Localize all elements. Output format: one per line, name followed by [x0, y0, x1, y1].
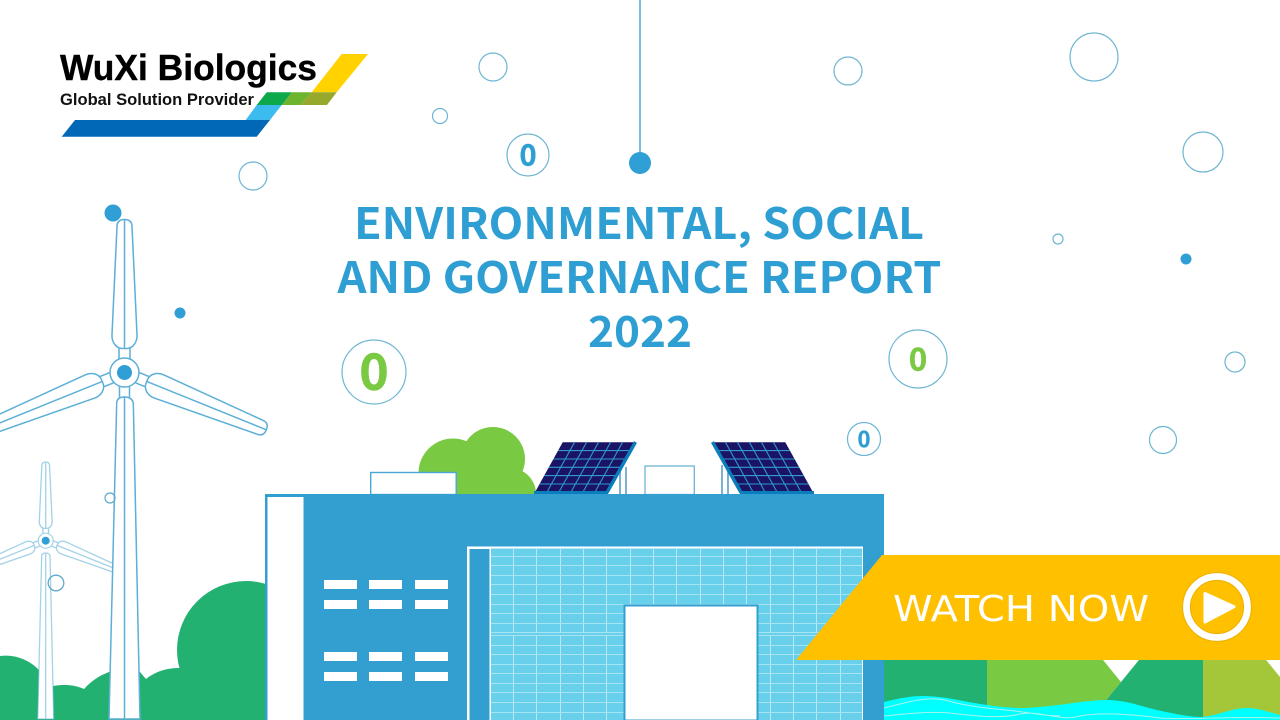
- building glass facade: [467, 546, 863, 720]
- small wind turbine: [0, 462, 121, 719]
- zero bubble: right green: [889, 330, 947, 388]
- building door: [624, 606, 758, 720]
- logo: WuXi Biologics: WuXi Biologics: [60, 47, 317, 88]
- green bushes: [0, 581, 315, 720]
- solar panel right: [712, 442, 814, 495]
- title: 2022: [588, 298, 692, 360]
- solar panel left: [534, 442, 636, 495]
- zero bubble: top: 0: [519, 132, 537, 174]
- bottom-right landscape: [884, 655, 1280, 720]
- logo: WuXi Biologics: [60, 47, 368, 137]
- call to action banner: watch now: WATCH NOW: [893, 589, 1149, 630]
- building white column: [268, 497, 304, 720]
- logo: WuXi Biologics: Global Solution Provider: [60, 90, 254, 109]
- title: [336, 190, 941, 360]
- rooftop box center: [645, 466, 694, 494]
- zero bubble: small blue: 0: [858, 422, 870, 454]
- rooftop box left: [371, 472, 456, 494]
- building: [265, 494, 884, 720]
- large wind turbine: [0, 220, 271, 719]
- title: ENVIRONMENTAL, SOCIAL: [354, 190, 924, 252]
- zero bubble: right green: 0: [909, 334, 927, 380]
- title: AND GOVERNANCE REPORT: [336, 244, 941, 306]
- call to action banner: watch now: [796, 555, 1280, 660]
- zero bubble: large green: 0: [359, 333, 389, 405]
- zero bubble: large green: [342, 333, 406, 405]
- small bubble near small turbine: [48, 575, 64, 591]
- zero bubble: small blue: [848, 422, 880, 456]
- rooftop bush: [418, 427, 536, 520]
- top dot by turbine: [104, 204, 122, 222]
- zero bubble: top: [507, 132, 549, 176]
- decorative bubbles: [174, 33, 1245, 454]
- hanging line with dot: [629, 0, 651, 174]
- building windows: [324, 580, 448, 681]
- small bubble over tower: [105, 493, 115, 503]
- icon: play button: [1186, 576, 1248, 638]
